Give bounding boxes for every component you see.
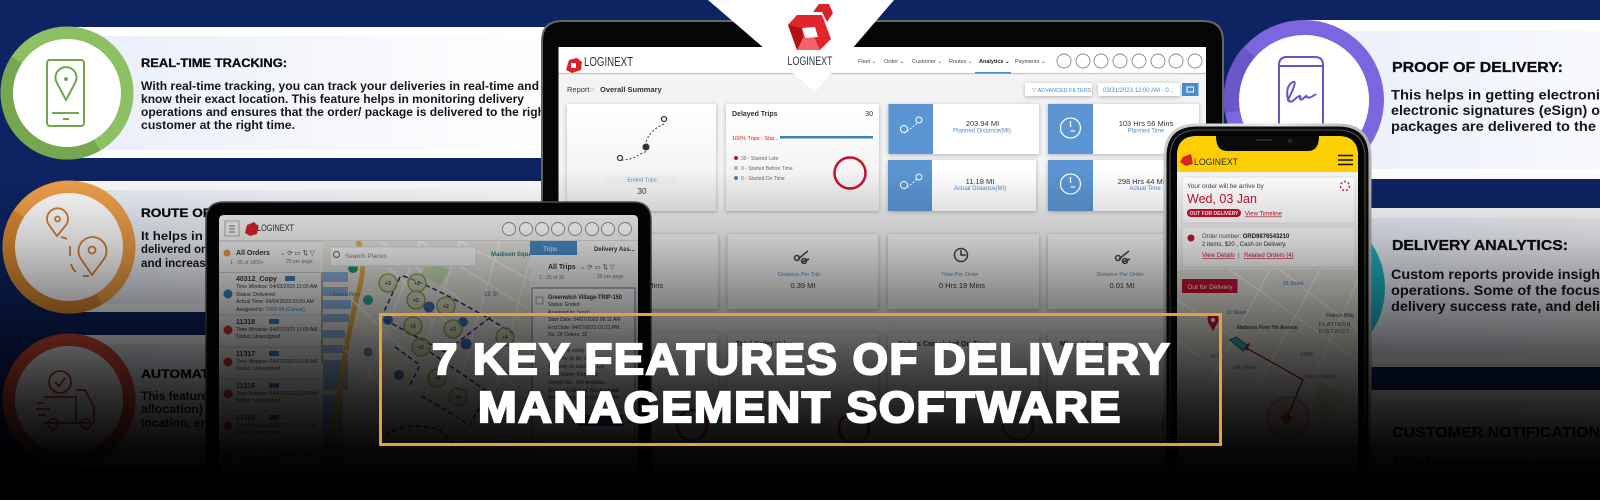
text block: This feature [141,391,208,403]
tile: planned distance: Planned Distance(MI) [953,128,1011,134]
row 2 cards: 0.01 MI [1109,281,1135,290]
order list: Status: Delivered [236,292,275,298]
trips panel: Amount Collected: Not Available [548,388,620,394]
title box [380,314,1220,444]
icon: route pins [9,187,129,307]
tablet app [205,201,652,449]
tile: actual distance: Actual Distance(MI) [954,186,1006,192]
text block: of their order/ package, includ [1391,469,1600,485]
card: ended trips: Ended Trips [627,178,657,184]
status button: Out for Delivery [1187,284,1233,291]
filter controls: 03/31/2023 12:00 AM - 0... [1103,88,1174,94]
text block: Custom reports provide insigh [1391,266,1600,282]
tile: planned time [1048,104,1199,154]
panel: proof of delivery [1231,20,1600,179]
text block: know their exact location. This feature helps in monitoring delivery [141,94,525,106]
map search box: Search Places [345,253,388,260]
tile: planned time: Planned Time [1128,128,1165,134]
trips panel: No. Of Orders: 32 [548,332,588,338]
nav menu: Analytics ⌄ [979,59,1010,65]
card: order details: Order number: ORD9876543210 [1202,234,1290,240]
text block: allocation) [141,404,203,416]
row 3 cards [567,333,1199,443]
icon: phone with location pin [7,33,127,153]
map: +4 [502,335,508,341]
text block: location, en [141,418,208,430]
order list: ⌄ ⟳ ▭ ⇅ ▽ [280,250,316,257]
tile: actual time: Actual Time [1129,186,1161,192]
trips panel: Amount Balanced: Not Available [548,395,620,401]
order list: Actual Time: 04/04/2023 03:00 AM [236,299,314,305]
card: delayed trips: Delayed Trips [732,111,778,118]
trips panel: Start Date: 04/07/2023 06:11 AM [548,474,620,480]
tablet nav icons [502,222,632,236]
card: delayed trips: 30 [865,111,873,118]
trips panel: Trips [543,246,558,253]
text block: It helps in cr [141,231,220,243]
card: delivery date: Wed, 03 Jan [1187,192,1257,206]
map: +2 [413,298,419,304]
panel: automated order allocation [9,335,557,466]
nav icons [1057,54,1202,68]
map: +3 [450,327,456,333]
trips panel: Start Date: 04/07/2023 06:11 AM [548,317,620,323]
card: order details: | [1238,253,1240,259]
phone map: 23 Street [1283,281,1304,287]
order list: 11318 [236,319,255,326]
map: Chelsea Piers [329,292,361,298]
order list: 25 per page [286,259,313,265]
trips panel: Assigned to: Smith [548,466,590,472]
filter controls: ▽ ADVANCED FILTERS [1032,88,1092,94]
trips panel: Last Trip: 04/07/2023 [548,443,595,449]
tile: actual time [1048,160,1198,211]
icon: analytics ring [1232,216,1378,360]
order list: 40312_Copy [236,276,277,283]
phone map: DISTRICT [1319,329,1350,335]
order list: 1 - 25 of 1000+ [230,260,264,266]
phone map: Mattress Firm 7th Avenue [1237,325,1298,331]
card: delayed trips: 0 - Started On Time [741,176,785,182]
text block: customer at the right time. [141,120,295,132]
order list: 11316 [236,383,255,390]
nav menu: Payments ⌄ [1015,59,1046,65]
breadcrumb: Overall Summary [600,85,663,94]
phone map: ZARA [1300,352,1314,358]
trips panel: 1 - 25 of 30 [539,275,565,281]
order list: 11317 [236,351,255,358]
nav menu: Fleet ⌄ [858,59,876,65]
phone header: LOGINEXT [1194,157,1238,168]
text block: delivered on [141,244,208,256]
order list: All Orders [236,250,270,257]
trips panel: Fleet Name: Fleet Left [548,372,598,378]
text block [1391,453,1600,485]
card: ended trips: 30 [638,187,647,196]
card: delivery date [1182,177,1355,223]
heading: ROUTE OPTIMIZATION: [141,206,293,220]
order list: Time Window: 04/07/2023 11:00 AM [236,455,318,461]
title [432,335,1171,432]
phone header [1177,136,1358,172]
text block: This helps in getting electroni [1391,86,1600,102]
map: 28 St [484,292,498,298]
phone map: 14th Street [1232,365,1257,371]
breadcrumb: Report [567,85,590,94]
trips panel: End Date: 04/07/2023 01:21 PM [548,325,619,331]
phone map: FLATIRON [1319,322,1351,328]
title: MANAGEMENT SOFTWARE [478,383,1122,432]
order list: Time Window: 04/07/2023 11:00 AM [236,359,318,365]
text block: operations. Some of the focus [1391,282,1600,298]
trips panel: ⌄ ⟳ ▭ ⇅ ▽ [580,264,616,271]
order list: Status: Unassigned [236,366,280,372]
trips panel: Greenwich Village-TRIP-150 [548,294,622,301]
order list: Status: Unassigned [236,334,280,340]
card: delayed trips: 0 - Started Before Time [741,166,793,172]
panel: customer notifications [1304,390,1600,500]
card: order details: 2 items, $20 , Cash on Delivery. [1202,242,1287,248]
map: +3 [455,395,461,401]
trips panel: No. Of Orders: 20 [548,490,588,496]
trips panel: All Trips [548,264,576,271]
row 3 cards: Total Order Value [736,341,794,348]
map [323,241,530,443]
row 2 cards [567,234,1199,309]
tile: actual distance: 11.18 MI [966,177,994,186]
text block [1391,266,1600,314]
logo: nav logo [566,55,633,73]
order list: 11314 [236,447,255,454]
card: delivery date: OUT FOR DELIVERY [1190,211,1239,217]
map: +3 [385,281,391,287]
phone map: 18 Street [1226,310,1247,316]
heading: PROOF OF DELIVERY: [1392,59,1563,76]
map: +2 [418,345,424,351]
row 2 cards: Time Per Order [941,272,979,278]
trips panel: Delivery Ass... [594,247,635,253]
order list: Time Window: 04/07/2023 11:00 AM [236,423,318,429]
card: order details: Related Orders (4) [1244,253,1294,259]
panel: route optimization [9,181,557,312]
card: delayed trips [726,104,879,211]
title: 7 KEY FEATURES OF DELIVERY [432,335,1171,384]
row 2 cards: 7 Hrs 26 Mins [617,281,663,290]
tile: planned distance [888,104,1039,154]
row 2 cards: 0 Hrs 19 Mins [939,281,985,290]
tablet logo: LOGINEXT [257,223,294,233]
text block: electronic signatures (eSign) o [1391,102,1600,118]
heading: CUSTOMER NOTIFICATION [1392,424,1600,441]
phone map: Union Square [1305,374,1336,380]
phone map: Flatiron Bldg [1326,313,1354,319]
status button [1182,279,1238,293]
text block [141,81,549,132]
map: +2 [443,304,449,310]
map: +2 [414,281,420,287]
nav menu: Order ⌄ [884,59,904,65]
tablet logo [225,221,294,236]
text block [141,231,220,270]
trips panel: 25 per page [597,274,624,280]
text block: and increasi [141,258,209,270]
panel: delivery analytics [1232,208,1600,367]
map search box [330,247,476,266]
map: +3 [410,324,416,330]
text block: This feature enables customer [1391,453,1600,469]
trips panel: Capacity (in cubic ft): 120 [548,364,605,370]
text block: delivery success rate, and deli [1391,298,1600,314]
row 2 cards: Distance Per Trip [778,272,820,278]
text block [141,391,208,430]
trips panel: Status: Ended [548,458,580,464]
panel: real-time tracking [7,27,557,158]
icon: delivery truck with clock [9,340,129,460]
nav menu: Customer ⌄ [912,59,942,65]
order list: Status: Unassigned [236,430,280,436]
phone tracking app [1164,124,1372,448]
icon: loginext logo [788,4,833,50]
nav menu: Routes ⌄ [949,59,973,65]
map: +4 [434,376,440,382]
trips panel: Capacity (in lb): 200 [548,356,593,362]
trips panel [530,241,638,500]
row 3 cards: Orders Completed On-Time [898,341,989,348]
logo badge: LOGINEXT [788,56,832,68]
phone map: 14 St [1210,354,1222,360]
tile: planned distance: 203.94 MI [966,119,999,128]
logo: nav logo: LOGINEXT [584,55,633,69]
order list: Time Window: 04/07/2023 11:00 AM [236,391,318,397]
trips panel: Assigned to: Smith [548,310,590,316]
tile: planned time: 103 Hrs 56 Mins [1119,119,1174,128]
trips panel: End Date: 04/07/2023 01:21 PM [548,482,619,488]
order list: Time Window: 04/03/2023 11:00 AM [236,284,318,290]
trips panel: Weight (in units): 50 [548,348,593,354]
breadcrumb [567,85,663,94]
tile: actual distance [888,160,1036,211]
text block: With real-time tracking, you can track your deliveries in real-time and [141,81,539,93]
icon: electronic signature [1231,28,1376,172]
card: ended trips [567,104,716,211]
heading: DELIVERY ANALYTICS: [1392,237,1568,254]
trips panel: Vehicle No.: Not Available [548,380,605,386]
heading: AUTOMATED ORDER ALLOCATION: [141,367,381,381]
breadcrumb: > [590,85,595,94]
trips panel: Status: Ended [548,302,580,308]
text block [1391,86,1600,134]
logo badge [708,0,894,92]
filter controls [1025,83,1198,96]
order list: Assigned to: TRIP-98 (Cancel) [236,307,305,313]
phone map [1177,270,1358,439]
tile: actual time: 298 Hrs 44 Mins [1118,177,1173,186]
card: order details: View Details [1202,253,1235,259]
heading: REAL-TIME TRACKING: [141,56,287,70]
card: delivery date: Your order will be arrive by [1187,183,1264,190]
card: delayed trips: 100% Trips - Star... [732,136,779,142]
text block: packages are delivered to the [1391,118,1596,134]
map: Madison Square [491,252,538,258]
order list: Status: Unassigned [236,462,280,468]
row 3 cards: Missed Orders [1060,341,1109,348]
row 2 cards: 0.39 MI [790,281,816,290]
order list: Time Window: 04/07/2023 11:00 AM [236,327,318,333]
nav menu [858,59,1046,74]
order list: 11315 [236,415,255,422]
laptop dashboard [542,21,1223,500]
row 2 cards: Distance Per Order [1096,272,1144,278]
card: delayed trips: 30 - Started Late [741,156,778,162]
card: order details [1182,227,1355,267]
text block: operations and ensures that the order/ package is delivered to the right [141,107,549,119]
order list [219,250,323,468]
card: delivery date: View Timeline [1245,212,1283,218]
order list: Status: Unassigned [236,398,280,404]
